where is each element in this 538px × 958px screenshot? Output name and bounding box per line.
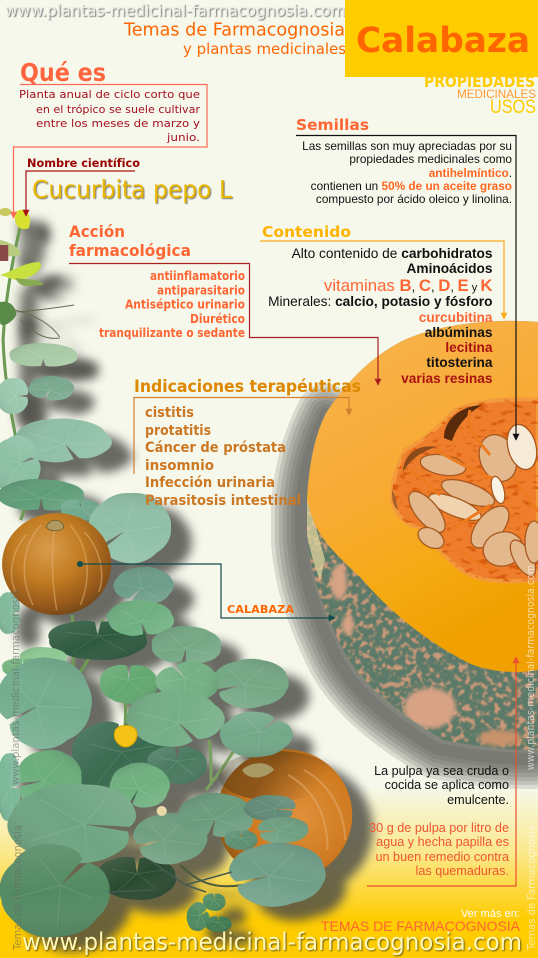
list: antiinflamatorio <box>150 269 245 283</box>
heading: Indicaciones terapéuticas <box>134 377 361 396</box>
arrow <box>260 241 504 319</box>
watermark: left vertical: Temas de Farmacognosia <box>11 825 24 951</box>
text block: entre los meses de marzo y <box>36 117 201 130</box>
list: Cáncer de próstata <box>145 440 286 456</box>
back pumpkin <box>216 749 352 881</box>
properties labels: MEDICINALES <box>457 87 536 101</box>
text block: emulcente. <box>447 793 509 807</box>
list: cistitis <box>145 405 194 421</box>
panel: accion farmacologica <box>69 222 378 385</box>
scientific name: Cucurbita pepo L <box>32 175 232 204</box>
text block: propiedades medicinales como <box>349 152 512 166</box>
panel: que es <box>14 58 207 218</box>
list: Infección urinaria <box>145 475 275 491</box>
pointer arrow <box>77 561 83 567</box>
flesh surface <box>307 321 538 672</box>
text block: dosage: las quemaduras. <box>416 864 509 878</box>
list: titosterina <box>426 355 493 370</box>
title block: Calabaza <box>356 21 530 61</box>
panel: contenido <box>260 223 504 386</box>
text block <box>302 139 512 206</box>
callout: calabaza <box>77 561 335 618</box>
top sprout <box>0 208 74 338</box>
arrow <box>14 84 207 218</box>
subtitle: y plantas medicinales <box>183 40 346 58</box>
arrow <box>134 398 349 474</box>
panel: nombre cientifico <box>26 156 232 216</box>
list: antiparasitario <box>157 284 245 298</box>
list: Aminoácidos <box>407 261 493 276</box>
panel: semillas <box>296 116 516 440</box>
plant shadow streaks <box>20 222 96 430</box>
arrow <box>296 136 516 440</box>
list: Diurético <box>190 312 245 326</box>
arrow <box>26 171 135 216</box>
heading: Semillas <box>296 116 369 134</box>
text block: junio. <box>166 131 200 144</box>
text block: dosage: 30 g de pulpa por litro de <box>369 821 509 835</box>
list: protatitis <box>145 423 211 439</box>
list <box>268 246 493 386</box>
text block: dosage: un buen remedio contra <box>375 850 510 864</box>
list <box>145 405 301 509</box>
text block <box>374 764 509 807</box>
list: Antiséptico urinario <box>125 298 245 312</box>
image: pumpkin slice <box>300 321 538 760</box>
text block: antihelmíntico. <box>429 166 512 180</box>
properties labels <box>424 72 536 118</box>
text block: en el trópico se suele cultivar <box>36 103 200 116</box>
footer <box>22 908 522 956</box>
text block: Planta anual de ciclo corto que <box>19 88 200 101</box>
heading: Contenido <box>262 223 351 241</box>
heading <box>69 222 191 260</box>
list: Parasitosis intestinal <box>145 493 301 509</box>
list: curcubitina <box>419 310 493 325</box>
icon: yellow flower <box>114 726 137 747</box>
list: insomnio <box>145 458 214 474</box>
arrow <box>69 264 378 385</box>
watermark: right vertical <box>524 565 538 951</box>
heading: Qué es <box>20 58 106 87</box>
text block <box>19 88 201 144</box>
heading: Acción <box>69 222 125 241</box>
see more: Ver más en: <box>461 908 520 920</box>
panel: pulpa <box>367 657 516 886</box>
watermark: right vertical: Temas de Farmacognosia <box>525 825 538 951</box>
text block: dosage: agua y hecha papilla es <box>376 835 509 849</box>
heading: Nombre científico <box>27 156 140 170</box>
top url: www.plantas-medicinal-farmacognosia.com <box>5 1 346 20</box>
bottom url: www.plantas-medicinal-farmacognosia.com <box>22 928 522 956</box>
list <box>99 269 245 340</box>
text block: cocida se aplica como <box>385 778 509 792</box>
slice shadow <box>301 414 532 759</box>
watermark: right vertical: www.plantas-medicinal-farmacognosia.com <box>524 565 537 770</box>
text block: compuesto por ácido oleico y linolina. <box>316 192 512 206</box>
subtitle: Temas de Farmacognosia <box>123 20 345 40</box>
list: Minerales: calcio, potasio y fósforo <box>268 294 492 309</box>
list: lecitina <box>445 340 493 355</box>
list: Alto contenido de carbohidratos <box>292 246 493 261</box>
list: vitaminas B, C, D, E y K <box>324 276 492 295</box>
text block: dosage <box>369 821 510 878</box>
watermark: left vertical: www.plantas-medicinal-farmacognosia <box>9 590 22 785</box>
front pumpkin <box>2 513 111 615</box>
list: albúminas <box>425 325 493 340</box>
title block <box>345 0 538 77</box>
text block: contienen un 50% de un aceite graso <box>311 179 512 193</box>
seed cavity <box>385 395 538 585</box>
site name: TEMAS DE FARMACOGNOSIA <box>321 918 521 934</box>
front leaves <box>0 642 340 955</box>
subtitle <box>123 20 346 58</box>
stems <box>3 225 242 886</box>
list: varias resinas <box>401 371 493 386</box>
leaves <box>0 343 300 714</box>
arrow <box>367 657 516 886</box>
list: tranquilizante o sedante <box>99 326 245 340</box>
text block: Las semillas son muy apreciadas por su <box>302 139 512 153</box>
label: CALABAZA <box>227 604 295 616</box>
image: climbing plant with pumpkins <box>0 208 352 955</box>
text block: La pulpa ya sea cruda o <box>374 764 509 778</box>
watermark: left vertical <box>9 590 24 951</box>
heading: farmacológica <box>69 241 191 260</box>
panel: indicaciones terapeuticas <box>134 377 361 509</box>
